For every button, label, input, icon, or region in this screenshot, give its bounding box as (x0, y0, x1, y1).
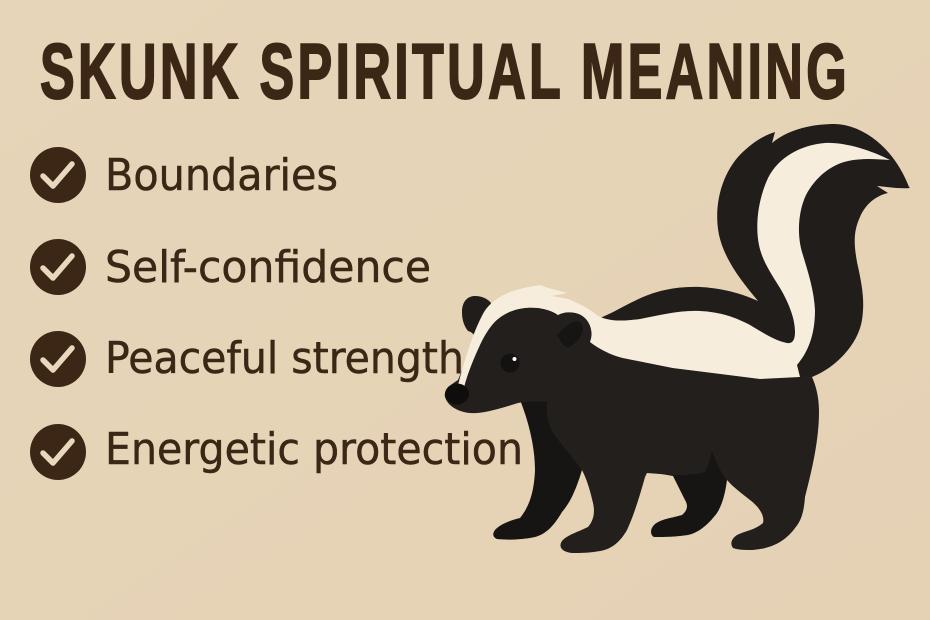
list item: Energetic protection: Energetic protection (105, 424, 523, 475)
far front leg (493, 400, 582, 540)
nose (445, 384, 469, 404)
inner ear (557, 321, 583, 348)
far ear (462, 296, 491, 345)
list item: Self-confidence: Self-confidence (105, 242, 431, 293)
tail and rump black fur (600, 124, 910, 380)
eye (500, 354, 520, 372)
list item: Peaceful strength: Peaceful strength (105, 333, 464, 384)
list item: Boundaries (30, 147, 338, 203)
body (445, 308, 819, 553)
list item: Boundaries: Boundaries (105, 150, 338, 201)
far hind leg (645, 445, 727, 537)
cream stripe on head, back and tail (458, 143, 890, 388)
skunk illustration (445, 124, 910, 553)
